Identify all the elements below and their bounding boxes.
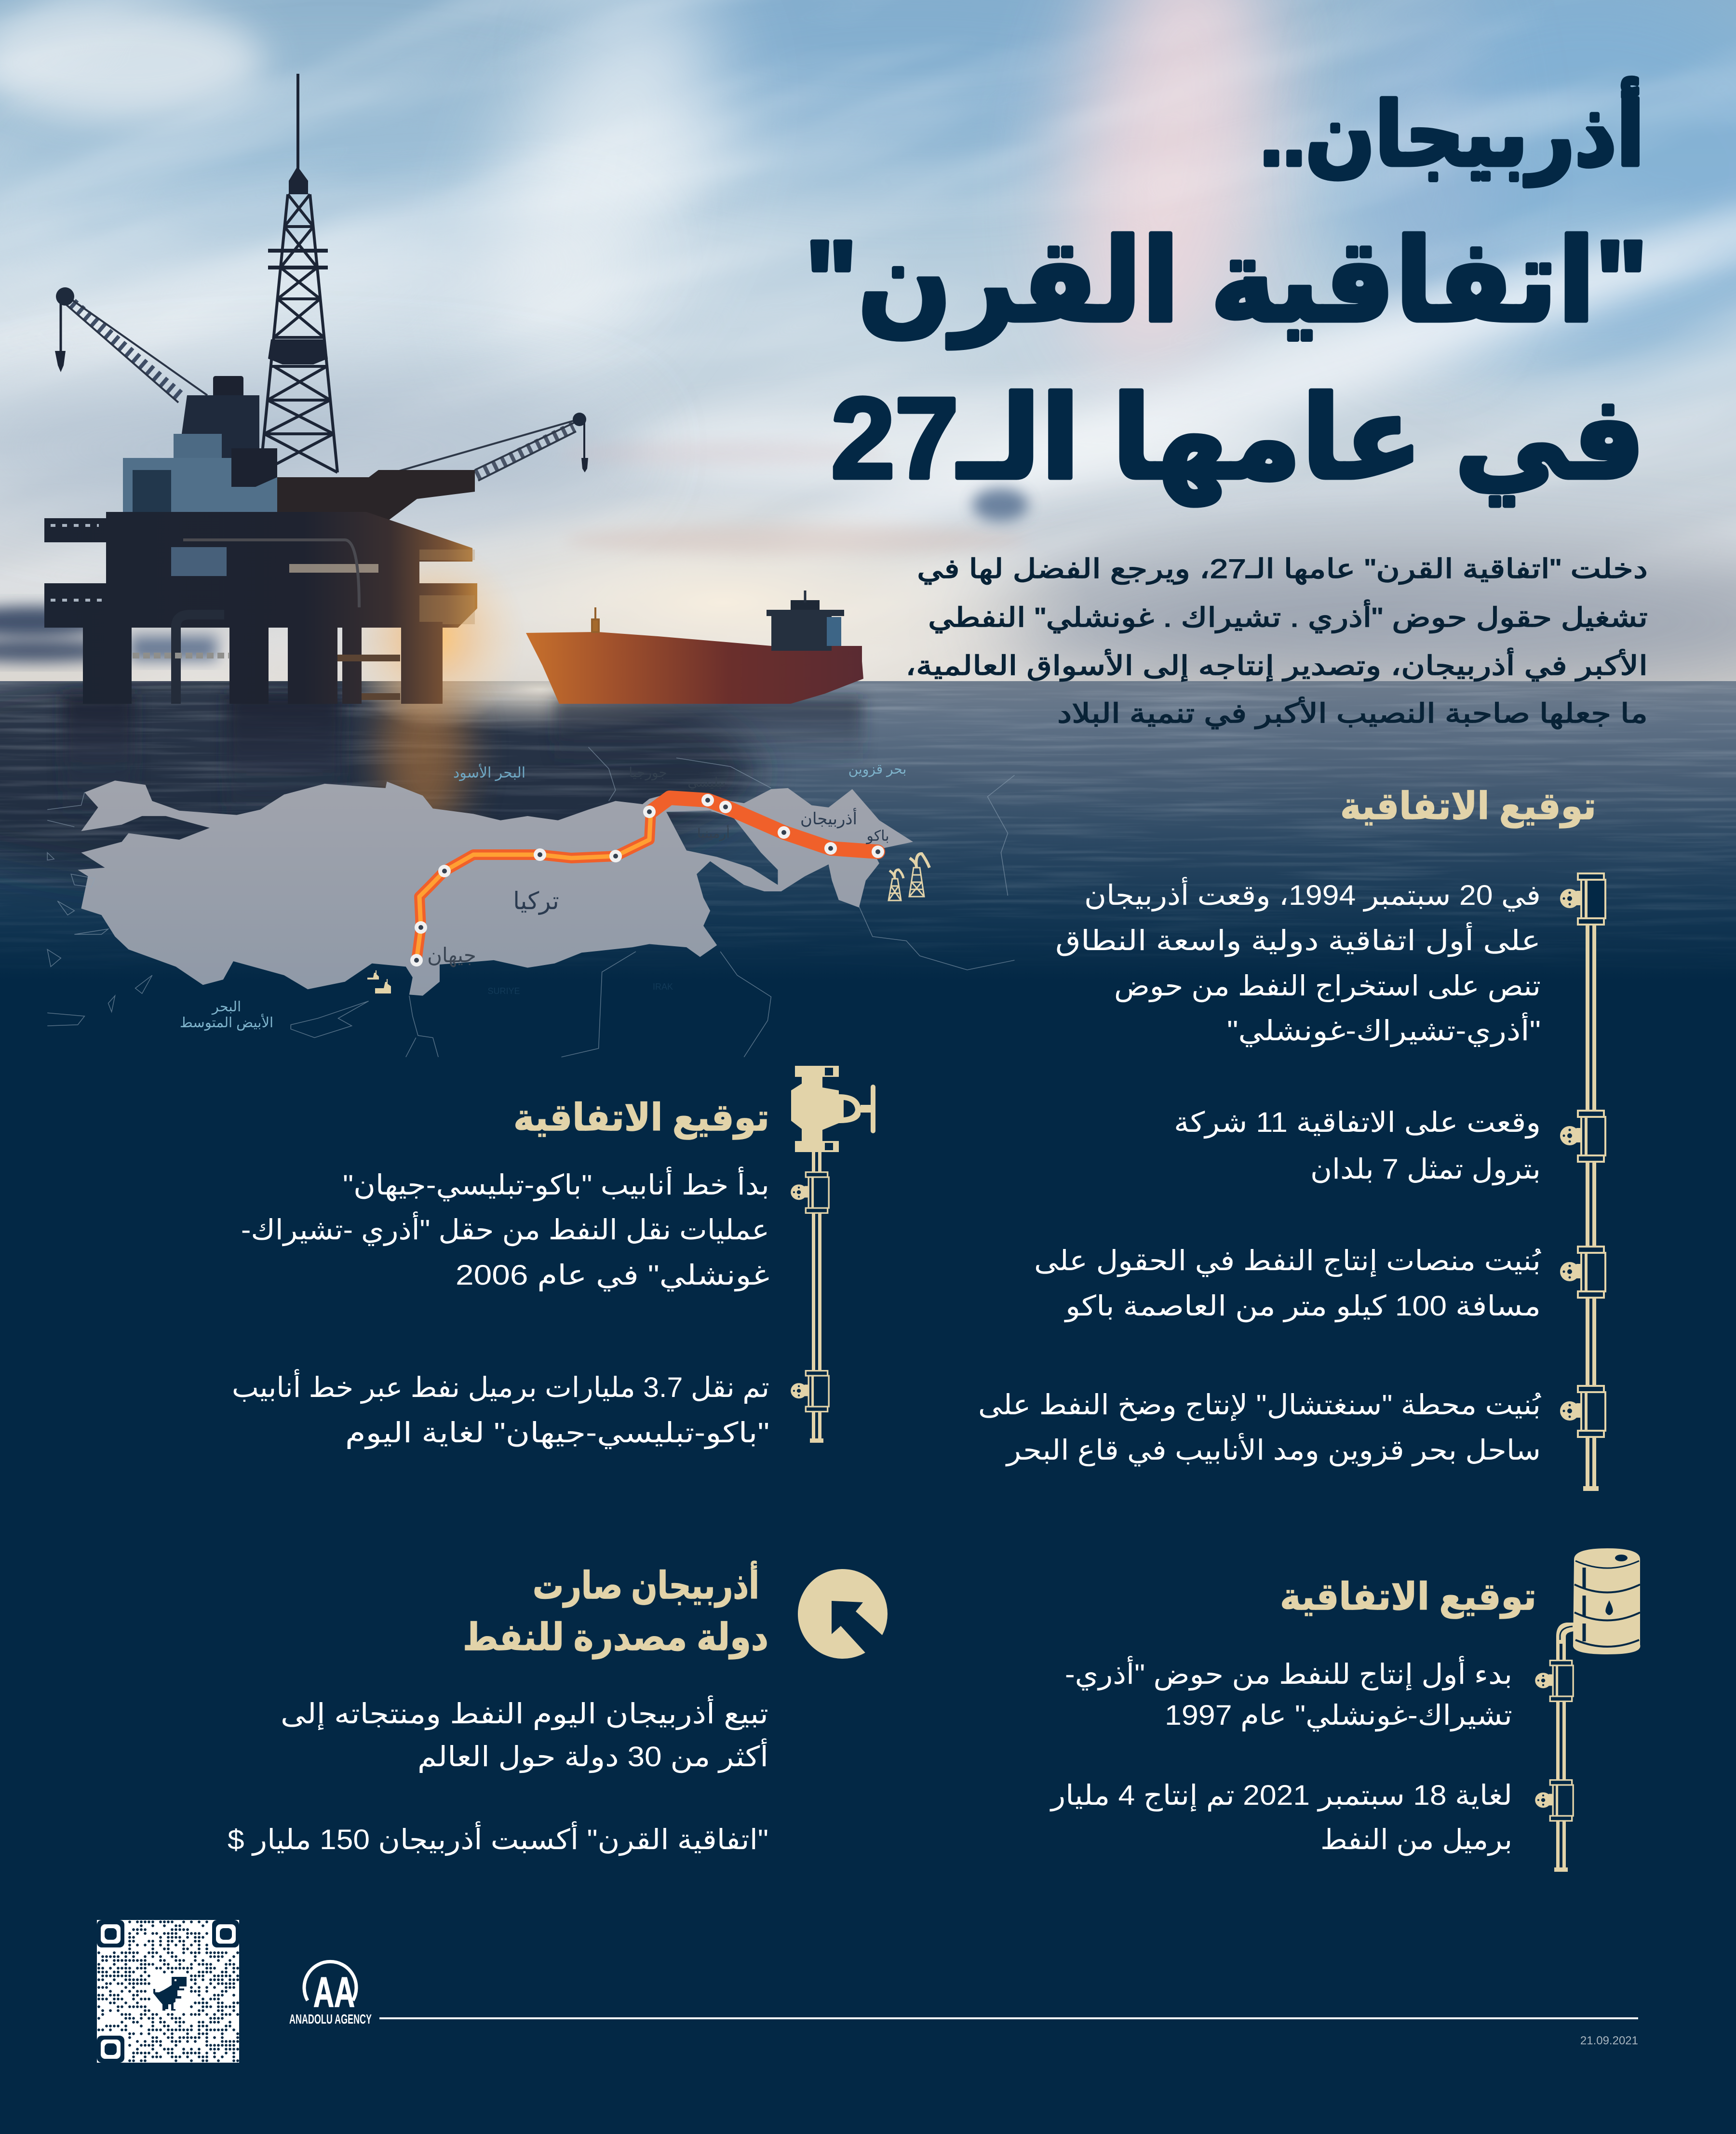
text block 4 <box>978 1389 1541 1467</box>
map labels: أرمينيا <box>697 824 730 841</box>
left crane <box>61 295 207 403</box>
text block <box>228 1695 768 1856</box>
map labels: IRAK <box>653 982 673 992</box>
photo: tanker ship <box>526 591 863 704</box>
text block 4: ساحل بحر قزوين ومد الأنابيب في قاع البحر <box>1005 1433 1541 1467</box>
text block 1: بدء أول إنتاج للنفط من حوض "أذري- <box>1065 1656 1512 1691</box>
icon: export arrow <box>798 1569 892 1661</box>
text block 2: تم نقل 3.7 مليارات برميل نفط عبر خط أنابيب <box>232 1369 769 1404</box>
text block 1: على أول اتفاقية دولية واسعة النطاق <box>1055 922 1541 957</box>
heading: دولة مصدرة للنفط <box>463 1616 768 1659</box>
heading <box>463 1561 768 1659</box>
map: Turkey and Caucasus land <box>78 780 913 996</box>
derrick tower <box>260 74 337 472</box>
heading: توقيع الاتفاقية <box>1340 785 1596 828</box>
text block 2: وقعت على الاتفاقية 11 شركة <box>1174 1107 1541 1139</box>
map: oil derrick icons <box>888 854 929 900</box>
Anadolu Agency logo: AA <box>313 1968 355 2016</box>
text block 1: عمليات نقل النفط من حقل "أذري -تشيراك- <box>241 1211 769 1247</box>
footer <box>97 1920 1638 2063</box>
date: 21.09.2021 <box>1580 2034 1638 2047</box>
photo: sea <box>0 681 1736 960</box>
text block 2: "باكو-تبليسي-جيهان" لغاية اليوم <box>345 1417 769 1450</box>
map: borders and coastlines <box>47 747 1015 1057</box>
photo: sky <box>0 0 1736 681</box>
panel: signing section (right) <box>978 785 1605 1491</box>
text block 3: بُنيت منصات إنتاج النفط في الحقول على <box>1034 1245 1541 1277</box>
text block: تبيع أذربيجان اليوم النفط ومنتجاته إلى <box>281 1695 768 1731</box>
text block 2 <box>1050 1780 1512 1856</box>
map <box>47 747 1015 1057</box>
photo: oil platform silhouette <box>44 74 588 733</box>
icon: oil barrel <box>1556 1548 1640 1654</box>
map labels: أذربيجان <box>800 808 857 828</box>
machinery and deck <box>213 376 243 419</box>
text block 3: مسافة 100 كيلو متر من العاصمة باكو <box>1064 1290 1541 1323</box>
heading: توقيع الاتفاقية <box>513 1096 769 1140</box>
panel: pipeline section (left) <box>232 1066 875 1450</box>
map labels: جيهان <box>427 944 476 967</box>
right crane <box>386 419 584 481</box>
pipe with valves <box>1535 1640 1573 1872</box>
text block 2: بترول تمثل 7 بلدان <box>1310 1154 1541 1186</box>
Anadolu Agency logo <box>289 1961 372 2027</box>
text block 2: لغاية 18 سبتمبر 2021 تم إنتاج 4 مليار <box>1050 1780 1512 1812</box>
title: "اتفاقية القرن" <box>805 217 1648 349</box>
text block 2 <box>1174 1107 1541 1186</box>
QR code <box>97 1920 239 2063</box>
intro text <box>905 553 1648 729</box>
map labels: الأبيض المتوسط <box>180 1013 273 1031</box>
platform legs <box>83 622 443 704</box>
Anadolu Agency logo: ANADOLU AGENCY <box>289 2012 372 2027</box>
heading: أذربيجان صارت <box>533 1561 759 1608</box>
map: pipeline <box>417 798 878 960</box>
map labels: جورجيا <box>629 765 667 780</box>
map labels: البحر الأسود <box>453 763 525 781</box>
text block 1: تشيراك-غونشلي" عام 1997 <box>1165 1700 1512 1732</box>
map labels: بحر قزوين <box>848 762 906 777</box>
text block 3 <box>1034 1245 1541 1323</box>
text block 4: بُنيت محطة "سنغتشال" لإنتاج وضخ النفط على <box>978 1389 1541 1422</box>
map labels: البحر <box>211 999 241 1015</box>
intro text: الأكبر في أذربيجان، وتصدير إنتاجه إلى الأسواق العالمية، <box>905 648 1648 682</box>
title <box>805 78 1648 506</box>
pipe with valves <box>791 1148 829 1443</box>
text block 2: برميل من النفط <box>1320 1824 1512 1856</box>
intro text: دخلت "اتفاقية القرن" عامها الـ27، ويرجع الفضل لها في <box>917 553 1648 585</box>
text block 1: غونشلي" في عام 2006 <box>456 1260 769 1292</box>
text block 1: تنص على استخراج النفط من حوض <box>1114 970 1541 1003</box>
intro text: ما جعلها صاحبة النصيب الأكبر في تنمية البلاد <box>1057 697 1648 729</box>
title: في عامها الـ27 <box>831 375 1645 506</box>
text block 1 <box>1065 1656 1512 1732</box>
footer rule <box>379 2017 1638 2019</box>
map: tanker icons <box>367 970 391 993</box>
text block 1 <box>1055 877 1541 1047</box>
text block: أكثر من 30 دولة حول العالم <box>417 1738 768 1773</box>
heading: توقيع الاتفاقية <box>1280 1575 1536 1619</box>
text block 1: في 20 سبتمبر 1994، وقعت أذربيجان <box>1084 877 1541 912</box>
panel: production section (right) <box>1050 1548 1640 1872</box>
map labels <box>180 762 906 1031</box>
map labels: تركيا <box>513 887 559 915</box>
title: أذربيجان.. <box>1260 78 1644 186</box>
intro text: تشغيل حقول حوض "أذري . تشيراك . غونشلي" النفطي <box>928 600 1648 633</box>
text block 1: بدأ خط أنابيب "باكو-تبليسي-جيهان" <box>343 1167 769 1202</box>
map: pipeline stations <box>410 794 884 966</box>
pipe with valves <box>1560 873 1605 1491</box>
text block: "اتفاقية القرن" أكسبت أذربيجان 150 مليار $ <box>228 1821 768 1856</box>
icon: large valve <box>791 1066 875 1152</box>
panel: export section (left) <box>228 1561 892 1856</box>
text block 1: "أذري-تشيراك-غونشلي" <box>1227 1012 1541 1047</box>
text block 1 <box>241 1167 769 1292</box>
map labels: تبليسي <box>687 775 726 790</box>
map labels: SURIYE <box>487 986 520 996</box>
text block 2 <box>232 1369 769 1450</box>
map labels: باكو <box>865 828 889 844</box>
